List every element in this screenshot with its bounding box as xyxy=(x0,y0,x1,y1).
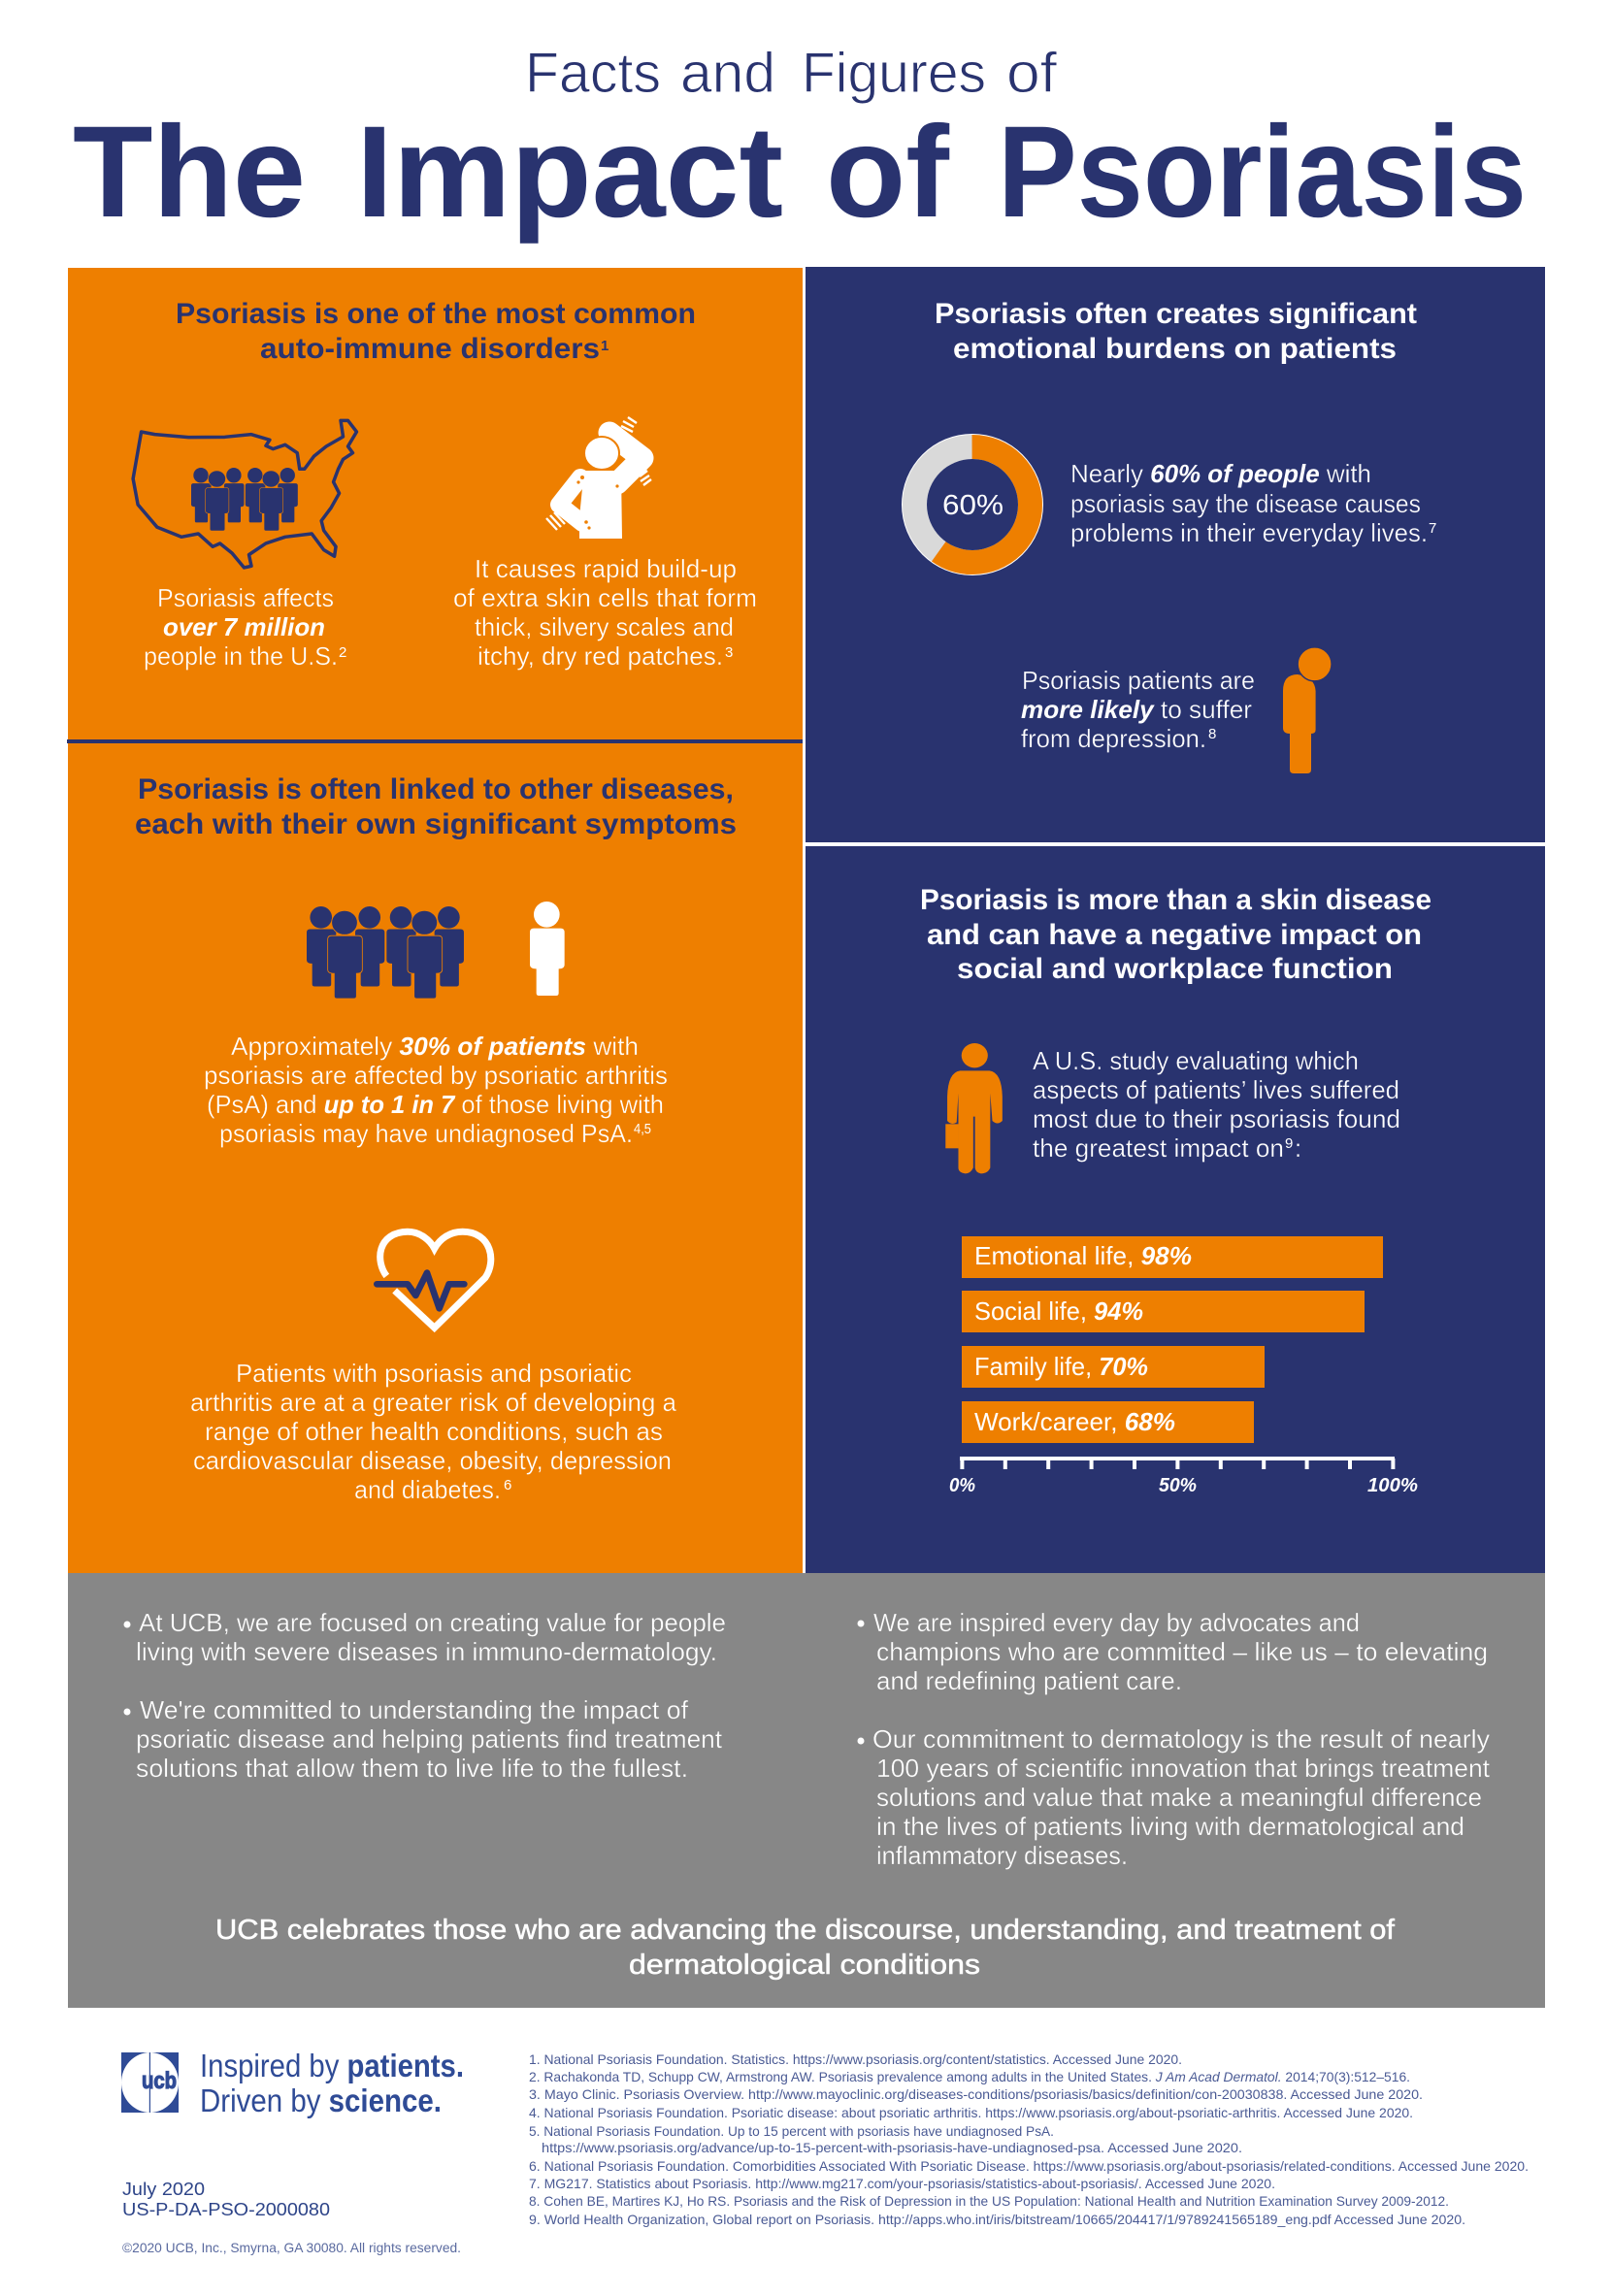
right bullets: Our commitment to dermatology is the result of nearly xyxy=(872,1724,1490,1754)
date and code: July 2020 xyxy=(122,2180,205,2199)
text: over 7 million: Psoriasis affects xyxy=(157,583,334,612)
heading: emotional burdens on patients xyxy=(953,333,1397,365)
left bullets xyxy=(124,1608,726,1783)
closing statement xyxy=(215,1915,1396,1981)
heading: social and workplace function xyxy=(957,953,1393,985)
axis: 100% xyxy=(1367,1475,1418,1496)
text: U.S. study: most due to their psoriasis found xyxy=(1033,1104,1400,1133)
bar: family life xyxy=(962,1346,1265,1388)
text: 30% of patients: psoriasis may have undiagnosed PsA. xyxy=(219,1119,633,1148)
logo: UCB: ucb xyxy=(142,2068,177,2094)
heading xyxy=(935,298,1417,365)
panel: linked diseases xyxy=(68,743,803,1573)
references: 6. National Psoriasis Foundation. Comorbidities Associated With Psoriatic Disease. https://www.psoriasis.org/about-psoriasis/related-conditions. Accessed June 2020. xyxy=(529,2158,1529,2174)
heading: each with their own significant symptoms xyxy=(135,808,737,840)
icon: heart with pulse xyxy=(377,1231,491,1328)
heading: auto-immune disorders xyxy=(260,333,600,365)
chart: 60% donut xyxy=(902,434,1043,575)
text: 60% of people: psoriasis say the disease causes xyxy=(1070,489,1421,518)
copyright: ©2020 UCB, Inc., Smyrna, GA 30080. All rights reserved. xyxy=(122,2240,461,2255)
main title: Psoriasis xyxy=(998,100,1527,245)
text: greater risk: Patients with psoriasis and psoriatic xyxy=(236,1359,632,1388)
references xyxy=(529,2051,1529,2227)
left bullets: solutions that allow them to live life to the fullest. xyxy=(136,1754,688,1783)
axis xyxy=(949,1459,1418,1496)
text: 30% of patients: (PsA) and up to 1 in 7 of those living with xyxy=(207,1090,664,1119)
logo: UCB xyxy=(121,2052,179,2113)
panel: social and workplace function xyxy=(806,846,1545,1573)
main title xyxy=(73,100,1527,245)
references: https://www.psoriasis.org/advance/up-to-15-percent-with-psoriasis-have-undiagnosed-psa. Accessed June 2020. xyxy=(542,2140,1242,2155)
date and code xyxy=(122,2180,330,2219)
text: 60% of people: problems in their everyday lives. xyxy=(1070,518,1428,547)
left bullets: At UCB, we are focused on creating value for people xyxy=(139,1608,726,1637)
references: 5. National Psoriasis Foundation. Up to 15 percent with psoriasis have undiagnosed PsA. xyxy=(529,2123,1054,2139)
bar: social life: Social life, 94% xyxy=(974,1296,1143,1326)
icon: person with briefcase xyxy=(945,1043,1003,1173)
text: 60% of people xyxy=(1070,459,1436,547)
references: 3. Mayo Clinic. Psoriasis Overview. http://www.mayoclinic.org/diseases-conditions/psoriasis/basics/definition/con-20030838. Accessed June 2020. xyxy=(529,2086,1423,2102)
icon: US map with people xyxy=(133,420,356,568)
icon: person scratching skin xyxy=(546,417,651,539)
text: over 7 million xyxy=(144,583,346,671)
heading: Psoriasis is more than a skin disease xyxy=(920,884,1431,916)
text: greater risk: cardiovascular disease, obesity, depression xyxy=(193,1446,672,1475)
references: 8. Cohen BE, Martires KJ, Ho RS. Psoriasis and the Risk of Depression in the US Population: National Health and Nutrition Examination Survey 2009-2012. xyxy=(529,2193,1449,2209)
text: more likely xyxy=(1021,666,1255,753)
tagline: Inspired by patients. xyxy=(200,2048,464,2083)
text: more likely: Psoriasis patients are xyxy=(1022,666,1255,695)
text: greater risk: and diabetes. xyxy=(354,1475,501,1504)
text: 60% of people: Nearly 60% of people with xyxy=(1070,459,1371,488)
subtitle: Figures xyxy=(802,42,986,105)
references: 9. World Health Organization, Global report on Psoriasis. http://apps.who.int/iris/bitstream/10665/204417/1/9789241565189_eng.pdf Accessed June 2020. xyxy=(529,2212,1465,2227)
text: over 7 million: people in the U.S. xyxy=(144,641,338,671)
panel: UCB commitment xyxy=(68,1573,1545,2008)
closing statement: dermatological conditions xyxy=(629,1950,980,1981)
text: 60% of people: 7 xyxy=(1429,520,1436,537)
icon: group of people and one person xyxy=(307,902,565,999)
axis: 0% xyxy=(949,1475,975,1496)
right bullets: and redefining patient care. xyxy=(876,1666,1182,1695)
right bullets: in the lives of patients living with dermatological and xyxy=(876,1812,1464,1841)
heading: Psoriasis is one of the most common xyxy=(176,298,696,330)
text: rapid build-up: thick, silvery scales and xyxy=(475,612,734,641)
text: greater risk: 6 xyxy=(504,1477,511,1493)
text: 30% of patients: psoriasis are affected by psoriatic arthritis xyxy=(204,1061,668,1090)
text: 30% of patients xyxy=(204,1032,668,1148)
right bullets xyxy=(858,1608,1491,1870)
panel: common auto-immune disorder xyxy=(68,268,803,739)
subtitle: and xyxy=(680,42,775,105)
main title: The xyxy=(73,100,306,245)
references: 1. National Psoriasis Foundation. Statistics. https://www.psoriasis.org/content/statistics. Accessed June 2020. xyxy=(529,2051,1182,2067)
left bullets: living with severe diseases in immuno-dermatology. xyxy=(136,1637,717,1666)
text: rapid build-up: It causes rapid build-up xyxy=(475,554,737,583)
heading: Psoriasis is often linked to other diseases, xyxy=(138,773,734,805)
chart: 60% donut: 60% xyxy=(942,490,1003,521)
main title: of xyxy=(826,100,949,245)
closing statement: UCB celebrates those who are advancing the discourse, understanding, and treatment of xyxy=(215,1915,1396,1946)
text: U.S. study: aspects of patients’ lives suffered xyxy=(1033,1075,1399,1104)
heading: Psoriasis often creates significant xyxy=(935,298,1417,330)
right bullets: champions who are committed – like us – to elevating xyxy=(876,1637,1488,1666)
right bullets: 100 years of scientific innovation that brings treatment xyxy=(876,1754,1491,1783)
text: U.S. study: 9 xyxy=(1285,1135,1293,1152)
subtitle: of xyxy=(1006,42,1058,105)
right bullets: inflammatory diseases. xyxy=(876,1841,1128,1870)
text: U.S. study: : xyxy=(1295,1133,1301,1163)
text: greater risk xyxy=(190,1359,677,1504)
right bullets: We are inspired every day by advocates and xyxy=(873,1608,1360,1637)
text: greater risk: arthritis are at a greater risk of developing a xyxy=(190,1388,677,1417)
references: 4. National Psoriasis Foundation. Psoriatic disease: about psoriatic arthritis. https://www.psoriasis.org/about-psoriatic-arthritis. Accessed June 2020. xyxy=(529,2105,1413,2120)
axis: 50% xyxy=(1159,1475,1197,1496)
references: 2. Rachakonda TD, Schupp CW, Armstrong AW. Psoriasis prevalence among adults in the United States. J Am Acad Dermatol. 2014;70(3):512–516. xyxy=(529,2069,1410,2084)
icon: depressed person xyxy=(1283,647,1332,773)
text: rapid build-up xyxy=(453,554,757,671)
text: 30% of patients: 4,5 xyxy=(634,1121,651,1137)
bar: emotional life: Emotional life, 98% xyxy=(974,1241,1192,1270)
text: rapid build-up: 3 xyxy=(725,644,733,661)
text: more likely: 8 xyxy=(1208,726,1216,742)
text: over 7 million: 2 xyxy=(339,644,346,661)
text: greater risk: range of other health conditions, such as xyxy=(205,1417,663,1446)
subtitle xyxy=(525,42,1058,105)
text: rapid build-up: of extra skin cells that form xyxy=(453,583,757,612)
heading xyxy=(135,773,737,840)
heading xyxy=(920,884,1431,985)
right bullets: solutions and value that make a meaningful difference xyxy=(876,1783,1482,1812)
heading: 1 xyxy=(601,338,609,354)
subtitle: Facts xyxy=(525,42,661,105)
bar: social life xyxy=(962,1291,1365,1332)
title block xyxy=(73,42,1527,245)
bar: family life: Family life, 70% xyxy=(974,1352,1148,1381)
heading: and can have a negative impact on xyxy=(927,919,1422,951)
tagline: Driven by science. xyxy=(200,2083,442,2118)
bar: emotional life xyxy=(962,1236,1383,1278)
bar: work/career xyxy=(962,1401,1254,1443)
left bullets: We're committed to understanding the impact of xyxy=(140,1695,689,1724)
references: 7. MG217. Statistics about Psoriasis. http://www.mg217.com/your-psoriasis/statistics-about-psoriasis/. Accessed June 2020. xyxy=(529,2176,1275,2191)
main title: Impact xyxy=(356,100,783,245)
heading xyxy=(176,298,696,365)
text: more likely: more likely to suffer xyxy=(1021,695,1252,724)
left bullets: psoriatic disease and helping patients find treatment xyxy=(136,1724,723,1754)
text: U.S. study: A U.S. study evaluating which xyxy=(1033,1046,1359,1075)
text: U.S. study: the greatest impact on xyxy=(1033,1133,1284,1163)
bar: work/career: Work/career, 68% xyxy=(974,1407,1175,1436)
text: over 7 million: over 7 million xyxy=(163,612,325,641)
tagline xyxy=(200,2048,464,2118)
text: more likely: from depression. xyxy=(1021,724,1206,753)
text: rapid build-up: itchy, dry red patches. xyxy=(477,641,723,671)
text: 30% of patients: Approximately 30% of patients with xyxy=(231,1032,639,1061)
text: U.S. study xyxy=(1033,1046,1400,1163)
panel: emotional burdens xyxy=(806,267,1545,842)
chart: impact bar chart xyxy=(949,1236,1418,1496)
date and code: US-P-DA-PSO-2000080 xyxy=(122,2200,330,2219)
